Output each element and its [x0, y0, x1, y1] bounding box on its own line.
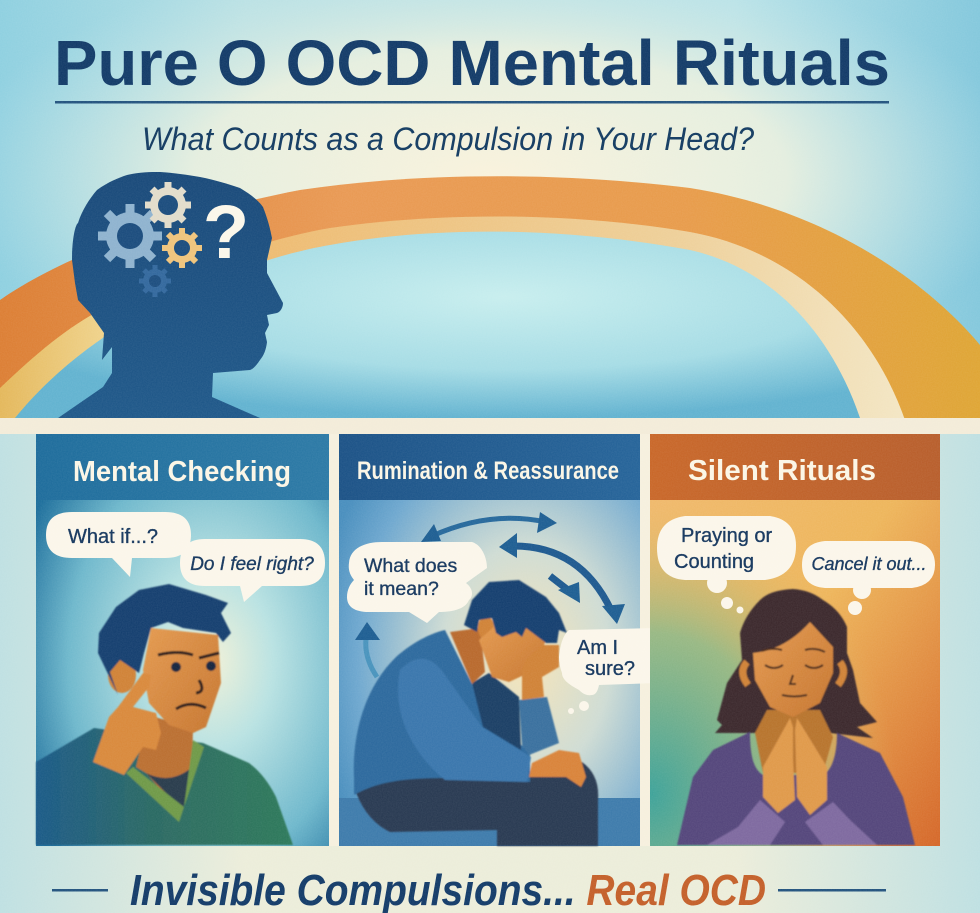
figure: man ruminating [354, 580, 598, 846]
heading: Rumination & Reassurance [357, 457, 619, 485]
footer divider right [778, 889, 886, 892]
head silhouette with gears [58, 172, 283, 418]
facial features [158, 652, 219, 709]
dark chest [472, 673, 521, 750]
forearm [519, 697, 559, 755]
thought bubble: praying or counting [657, 516, 796, 614]
speech bubble: do i feel right: Do I feel right? [190, 554, 314, 575]
header bar [339, 434, 640, 500]
title: Pure O OCD Mental Rituals [54, 27, 890, 99]
header bar [650, 434, 940, 500]
closed eyes, brows and mouth [762, 649, 825, 696]
collar [126, 740, 204, 822]
background sky [0, 0, 980, 420]
hair [98, 584, 231, 695]
neck [755, 710, 833, 773]
speech bubble: what if [46, 512, 191, 577]
thought bubble: praying or counting: Counting [674, 551, 754, 573]
figure: man checking [36, 584, 293, 845]
face [479, 625, 546, 682]
sleeves [707, 800, 877, 845]
torso [354, 630, 530, 795]
neck [136, 715, 193, 812]
circular arrows [355, 512, 625, 677]
gear large [98, 204, 162, 268]
sleeve arm [398, 659, 531, 782]
face [143, 628, 221, 733]
panel: rumination and reassurance [339, 434, 671, 846]
header bar [36, 434, 329, 500]
silhouette [58, 172, 283, 418]
rainbow arc [0, 176, 980, 420]
speech bubble: am i sure [559, 628, 671, 714]
hand [93, 673, 161, 775]
thought bubble: praying or counting: Praying or [681, 525, 772, 547]
gear small [139, 265, 171, 297]
question mark: ? [203, 190, 249, 275]
speech bubble: am i sure: Am I [577, 637, 618, 659]
speech bubble: am i sure: sure? [585, 658, 635, 680]
hair [715, 589, 877, 738]
speech bubble: do i feel right [180, 539, 325, 602]
speech bubble: what does it mean [347, 542, 487, 623]
face [753, 622, 833, 717]
raised hand [522, 645, 559, 700]
legs [354, 762, 598, 846]
undershirt [146, 768, 191, 810]
lower cream background [0, 418, 980, 913]
speech bubble: what does it mean: What does [364, 555, 457, 577]
neck [450, 628, 485, 684]
gear cream [145, 182, 191, 228]
speech bubble: what if: What if...? [68, 526, 158, 548]
thought bubble: cancel it out: Cancel it out... [811, 554, 927, 574]
ears [743, 662, 844, 685]
panel: mental checking [36, 434, 329, 846]
figure: woman praying [677, 589, 915, 845]
heading: Silent Rituals [688, 455, 876, 487]
bench [339, 798, 640, 846]
heading: Mental Checking [73, 456, 291, 488]
resting hand [529, 750, 586, 787]
gear orange [162, 228, 202, 268]
title rule [55, 101, 889, 104]
footer divider left [52, 889, 108, 892]
thought bubble: cancel it out [802, 541, 935, 615]
panel: silent rituals [650, 434, 940, 846]
ear [478, 616, 494, 640]
hair [464, 580, 567, 643]
sweater [36, 728, 293, 845]
sweater [677, 732, 915, 845]
ear [108, 657, 136, 693]
subtitle: What Counts as a Compulsion in Your Head? [142, 121, 754, 157]
praying hands [763, 718, 827, 815]
speech bubble: what does it mean: it mean? [364, 578, 439, 600]
